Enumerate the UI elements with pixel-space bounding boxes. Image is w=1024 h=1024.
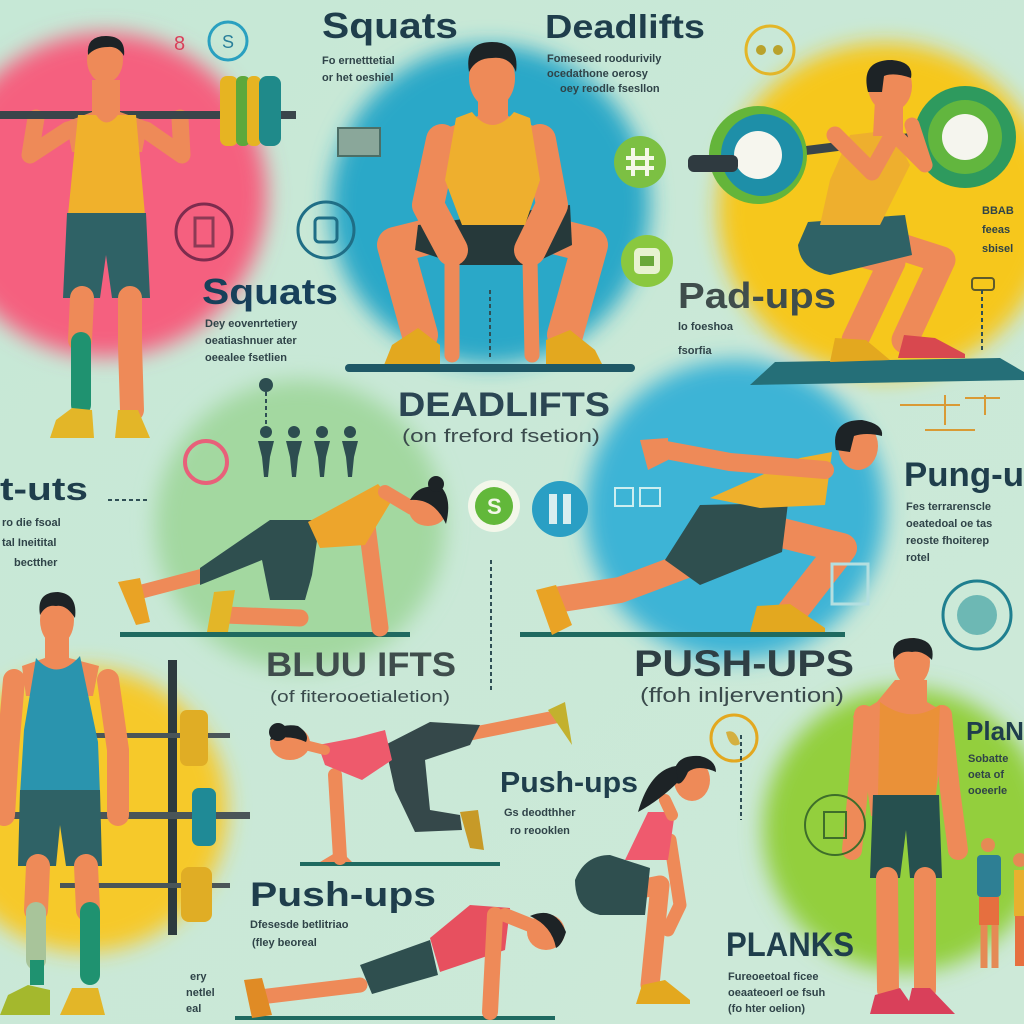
text: plan note: oeta of [968, 769, 1004, 781]
heading: t-uts left: t-uts [0, 471, 88, 507]
icon: S badge top [209, 22, 247, 60]
heading: Squats: Squats [202, 271, 338, 312]
text: right side note: BBAB [982, 205, 1014, 217]
text: left note: bectther [14, 557, 58, 569]
text: deadlifts note: (on freford fsetion) [402, 426, 600, 446]
text: left note: tal Ineitital [2, 537, 56, 549]
icon: people row [258, 426, 358, 477]
node dot [259, 378, 273, 392]
figure: squatting woman [575, 756, 716, 1004]
text: push-ups small note: ro reooklen [510, 825, 570, 837]
text: pad-ups note: fsorfia [678, 345, 712, 357]
text: squats note: Dey eovenrtetiery [205, 318, 298, 330]
icon: gold ring [711, 715, 757, 761]
icon: left plate [688, 106, 807, 204]
icon: green note badge [621, 235, 673, 287]
text: push-ups lower note: (fley beoreal [252, 937, 317, 949]
mat under centre squat [345, 364, 635, 372]
text: push-ups note: (ffoh inljervention) [640, 685, 844, 707]
text: right side note: feeas [982, 224, 1010, 236]
heading: Deadlifts centre: DEADLIFTS [398, 386, 610, 424]
text: bottom note: ery [190, 971, 207, 983]
heading: Push-ups small: Push-ups [500, 767, 638, 799]
text: pung-u note: oeatedoal oe tas [906, 518, 992, 530]
icon: pink ring badge [176, 204, 232, 260]
icon: clipboard [338, 128, 380, 156]
text: squats top note: Fo ernetttetial [322, 55, 395, 67]
text: left note: ro die fsoal [2, 517, 61, 529]
icon: goggles badge [746, 26, 794, 74]
heading: Push-ups lower: Push-ups [250, 876, 436, 914]
figure: centre squat man [382, 42, 605, 370]
text: squats note: oeatiashnuer ater [205, 335, 297, 347]
heading: Deadlifts top: Deadlifts [545, 8, 705, 45]
text: pung-u note: Fes terrarenscle [906, 501, 991, 513]
heading: Squats top: Squats [322, 5, 458, 46]
connector lines [108, 290, 982, 820]
text: planks note: oeaateoerl oe fsuh [728, 987, 825, 999]
icon: S badge top: S [222, 32, 234, 52]
small background people [977, 838, 1024, 968]
text: deadlifts top note: oey reodle fsesllon [560, 83, 660, 95]
text: deadlifts top note: ocedathone oerosy [547, 68, 649, 80]
icon: barbell rack [0, 660, 250, 935]
icon: green plus badge [614, 136, 666, 188]
icon: green ring [805, 795, 865, 855]
text: push-ups small note: Gs deodthher [504, 807, 576, 819]
icon: orange gauge marks [900, 395, 1000, 430]
heading: Bluu lifts: BLUU IFTS [266, 646, 456, 684]
text: plan note: ooeerle [968, 785, 1007, 797]
icon: green S badge [468, 480, 520, 532]
text: pung-u note: rotel [906, 552, 930, 564]
text: squats note: oeealee fsetlien [205, 352, 287, 364]
figure: standing man with barbell [0, 36, 296, 438]
heading: Plan right: PlaN [966, 716, 1024, 746]
icon: weight plates [220, 76, 281, 146]
text: plan note: Sobatte [968, 753, 1008, 765]
text: right side note: sbisel [982, 243, 1013, 255]
icon: small sign post [972, 278, 994, 290]
text: bluu lifts note: (of fiterooetialetion) [270, 687, 450, 706]
figure: side squat with barbell [688, 60, 1024, 385]
icon: square outline [832, 564, 868, 604]
text: pung-u note: reoste fhoiterep [906, 535, 989, 547]
heading: Pung-u: Pung-u [904, 456, 1024, 494]
figure: bird-dog woman [269, 702, 572, 866]
text: planks note: (fo hter oelion) [728, 1003, 805, 1015]
icon: teal circle badge [943, 581, 1011, 649]
text: deadlifts top note: Fomeseed roodurivily [547, 53, 662, 65]
text: pad-ups note: lo foeshoa [678, 321, 734, 333]
text: planks note: Fureoeetoal ficee [728, 971, 818, 983]
heading: Push-ups centre: PUSH-UPS [634, 643, 854, 684]
icon: blue ring badge [298, 202, 354, 258]
icon: charts in blue blob [615, 488, 660, 506]
icon: blue bars badge [532, 481, 588, 537]
figure: standing man at rack [0, 592, 250, 1015]
icon: 8 glyph: 8 [174, 33, 185, 55]
figure: shirtless standing man [852, 638, 958, 1014]
text: squats top note: or het oeshiel [322, 72, 394, 84]
figure: plank man [235, 905, 566, 1020]
heading: Planks: PLANKS [726, 926, 854, 964]
text: bottom note: eal [186, 1003, 201, 1015]
text: bottom note: netlel [186, 987, 215, 999]
icon: green S badge: S [487, 494, 502, 519]
text: push-ups lower note: Dfesesde betlitriao [250, 919, 349, 931]
exercise mat [750, 358, 1024, 385]
figure: lunge man [520, 420, 882, 637]
icon: pink ring [185, 441, 227, 483]
icon: right plate [914, 86, 1016, 188]
figure: all-fours woman [118, 476, 448, 637]
heading: Pad-ups: Pad-ups [678, 275, 836, 316]
